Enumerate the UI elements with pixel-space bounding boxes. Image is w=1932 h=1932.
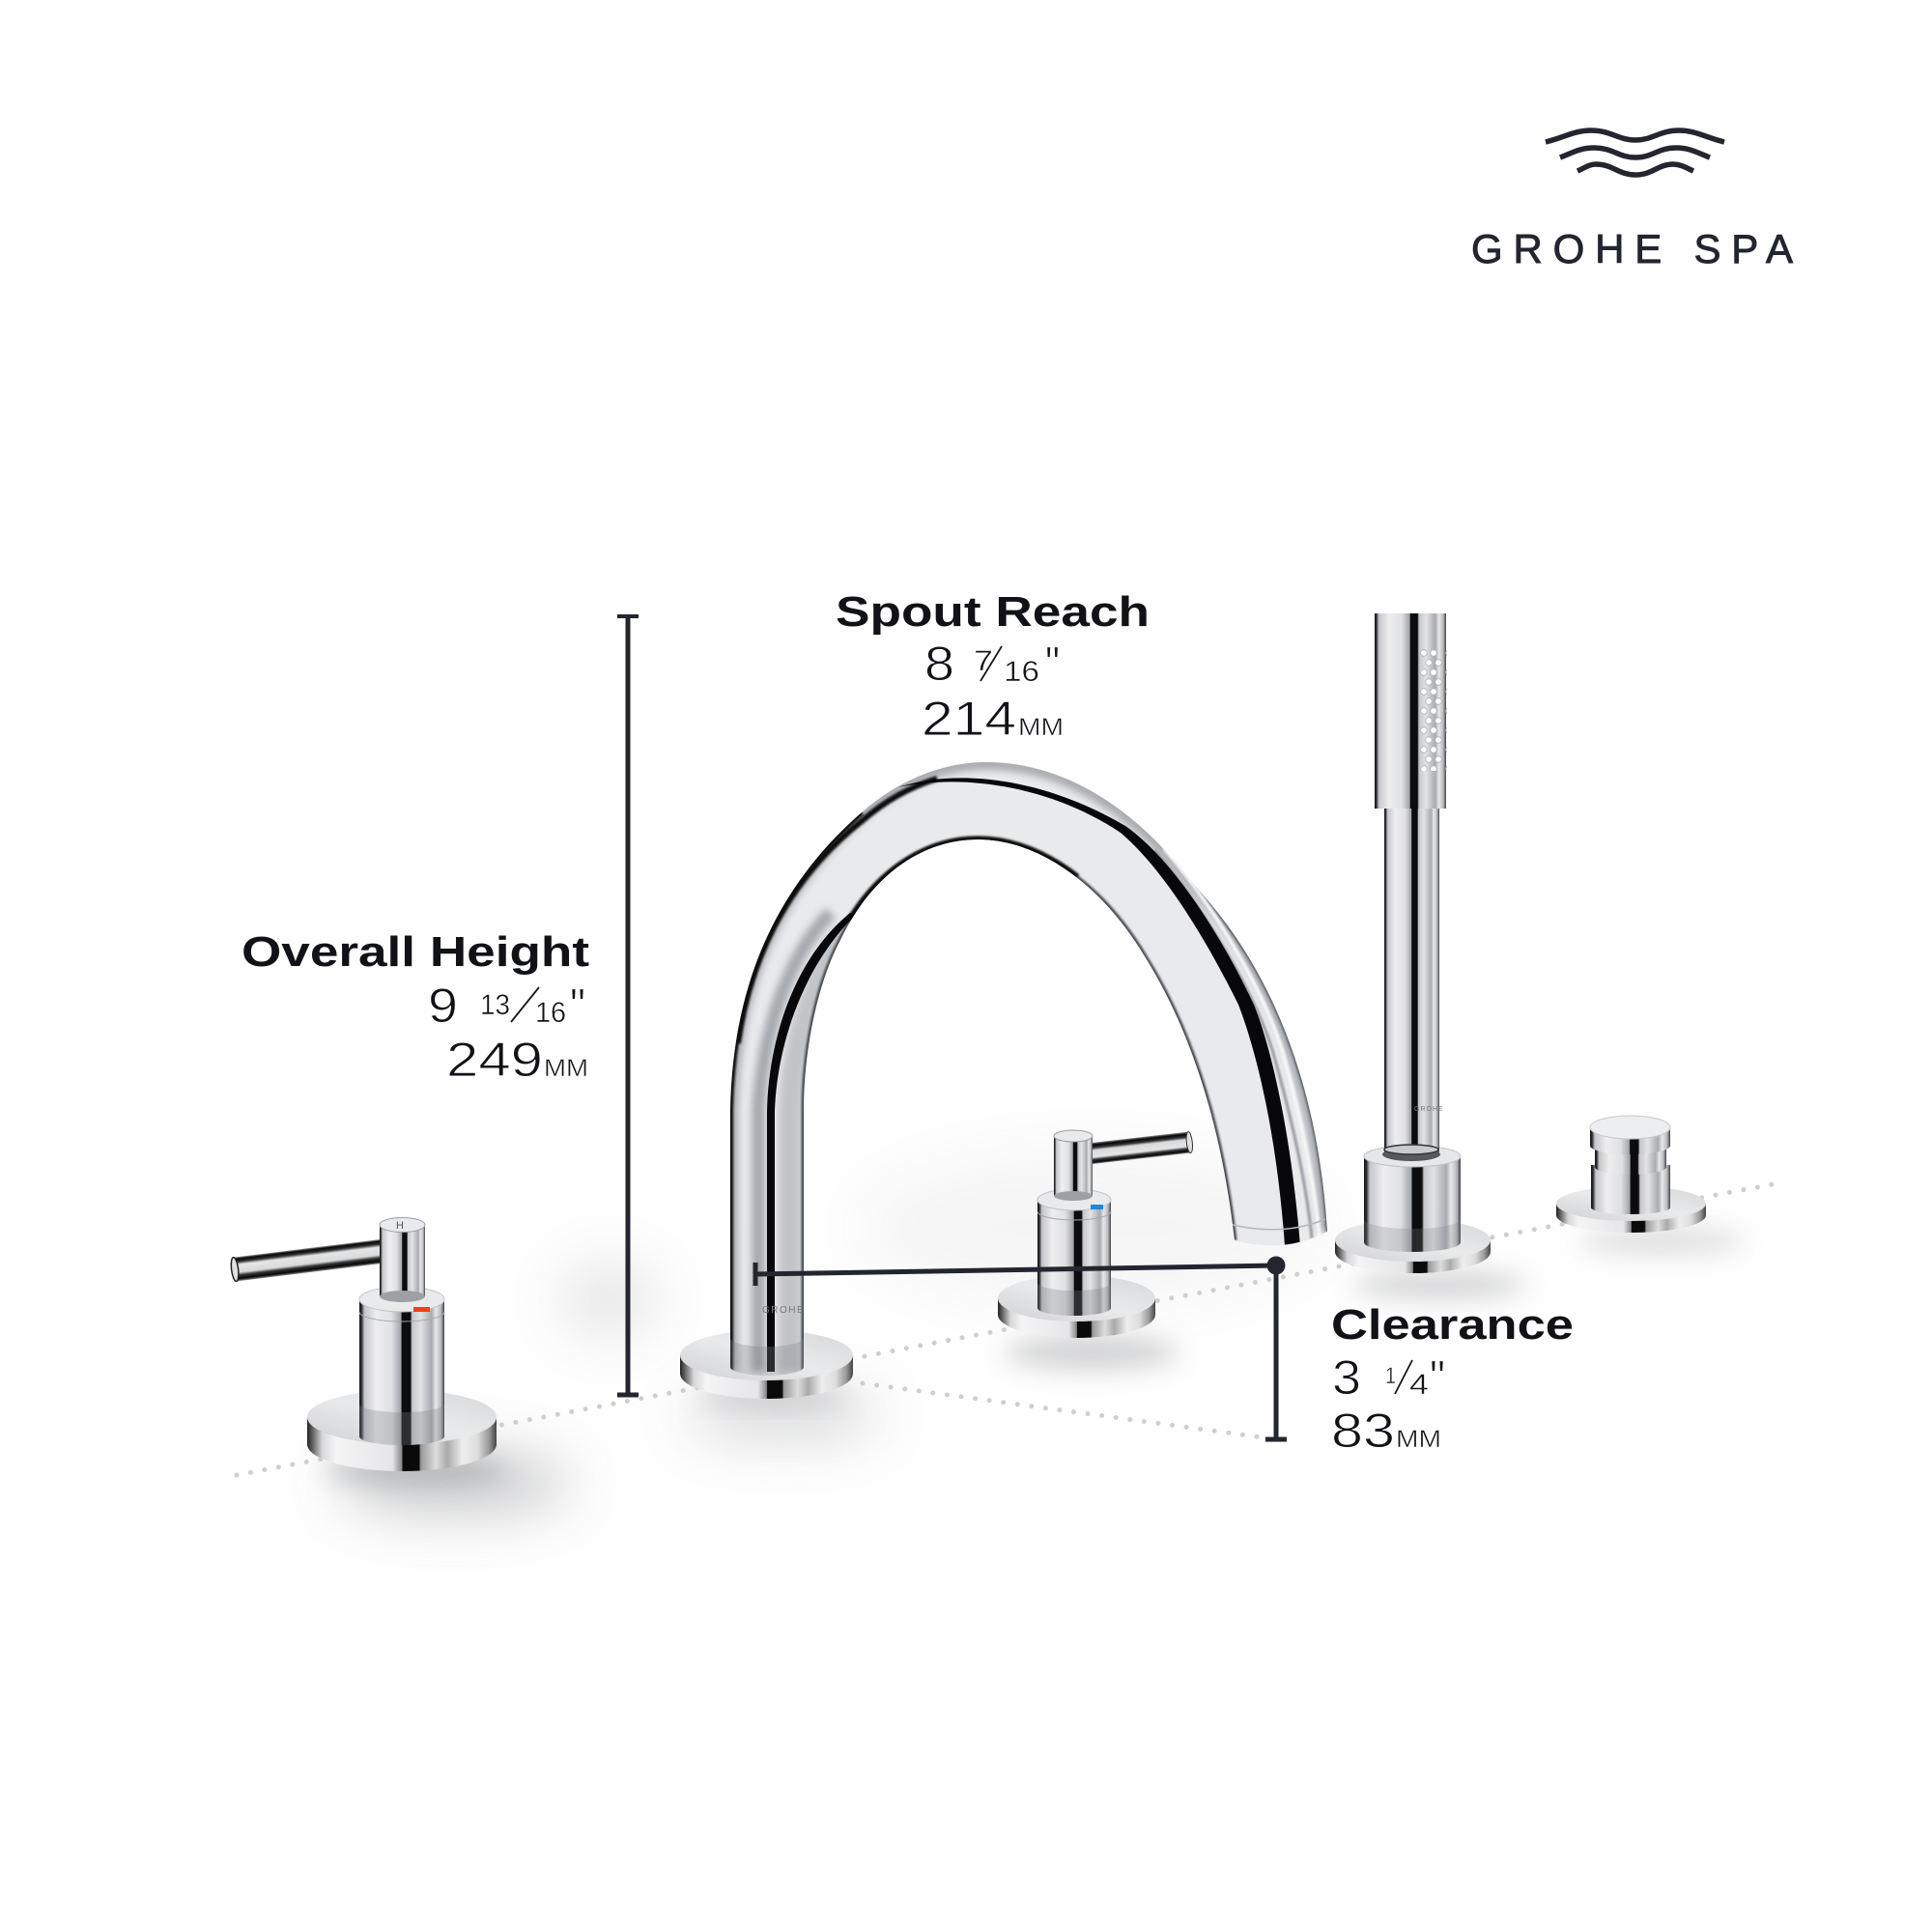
faucet: cold handle bbox=[998, 1130, 1194, 1338]
value: spout reach millimetres bbox=[922, 692, 1064, 746]
foot reflection bbox=[730, 1338, 804, 1376]
black streak right bbox=[898, 778, 1300, 1246]
faucet: spout bbox=[680, 744, 1343, 1399]
logo wordmark: GROHE SPA bbox=[1471, 226, 1799, 271]
value: clearance millimetres: MM bbox=[1396, 1426, 1441, 1453]
value: overall height inches bbox=[428, 979, 585, 1033]
faucet: hot handle bbox=[230, 1217, 497, 1471]
hand shower holder bbox=[1364, 1146, 1461, 1252]
faucet: hand shower bbox=[1335, 613, 1491, 1273]
label: clearance bbox=[1331, 1301, 1574, 1458]
hot handle lever bbox=[230, 1238, 389, 1282]
floor shadows bbox=[324, 1150, 1744, 1516]
value: clearance inches: 1 bbox=[1385, 1363, 1396, 1389]
hot handle upper stem bbox=[380, 1217, 425, 1302]
heading: clearance: Clearance bbox=[1331, 1301, 1574, 1349]
logo: Grohe Spa bbox=[1471, 130, 1799, 271]
dimension: overall height bar bbox=[617, 616, 639, 1395]
nozzle line bbox=[1233, 1219, 1325, 1230]
dotted floor lines bbox=[237, 1184, 1773, 1475]
value: overall height inches: " bbox=[570, 979, 585, 1033]
faucet: diverter knob bbox=[1556, 1116, 1706, 1233]
reflection beyond streak bbox=[1154, 850, 1312, 1238]
heading: overall height: Overall Height bbox=[242, 928, 589, 976]
value: overall height inches: 9 bbox=[428, 979, 458, 1033]
label: spout reach bbox=[836, 588, 1150, 746]
value: spout reach inches: 16 bbox=[1004, 656, 1039, 688]
hot handle base disc bbox=[307, 1390, 497, 1471]
value: clearance millimetres: 83 bbox=[1331, 1404, 1395, 1458]
value: overall height millimetres bbox=[446, 1033, 588, 1087]
cold handle body bbox=[1037, 1189, 1111, 1316]
spout arch bbox=[715, 744, 1343, 1391]
value: spout reach millimetres: MM bbox=[1018, 714, 1064, 741]
cold handle upper stem bbox=[1054, 1130, 1093, 1201]
black streak left bbox=[767, 913, 858, 1372]
diverter top cap bbox=[1590, 1116, 1670, 1154]
value: spout reach inches: 8 bbox=[924, 637, 954, 691]
inner lit band bbox=[790, 932, 848, 1372]
cold handle lever bbox=[1083, 1131, 1194, 1165]
hand shower wand bbox=[1382, 809, 1444, 1161]
label: overall height bbox=[242, 928, 589, 1087]
spout base disc bbox=[680, 1330, 853, 1399]
value: spout reach inches: " bbox=[1045, 637, 1060, 691]
icon: three waves bbox=[1546, 130, 1724, 175]
diverter collar bbox=[1595, 1148, 1666, 1175]
value: clearance inches: 4 bbox=[1409, 1369, 1429, 1401]
value: spout reach millimetres: 214 bbox=[922, 692, 1016, 746]
value: spout reach inches: 7 bbox=[974, 645, 993, 677]
value: overall height millimetres: 249 bbox=[446, 1033, 543, 1087]
hot handle upper stem: H bbox=[396, 1220, 404, 1232]
hot handle body bbox=[359, 1287, 444, 1445]
diverter base disc bbox=[1556, 1186, 1706, 1233]
hot indicator bbox=[413, 1307, 430, 1312]
diverter lower cylinder bbox=[1591, 1165, 1670, 1214]
cold indicator bbox=[1091, 1205, 1103, 1209]
value: clearance inches bbox=[1332, 1350, 1445, 1405]
value: spout reach inches bbox=[924, 637, 1060, 691]
engraved mark: GROHE SPA bbox=[762, 1305, 832, 1316]
value: overall height inches: 13 bbox=[480, 989, 510, 1021]
value: clearance inches: " bbox=[1430, 1350, 1445, 1405]
heading: spout reach: Spout Reach bbox=[836, 588, 1150, 636]
hand shower head bbox=[1375, 613, 1447, 809]
dimension: spout reach and clearance bars bbox=[755, 1256, 1287, 1439]
value: clearance millimetres bbox=[1331, 1404, 1441, 1458]
hand shower wand: GROHE bbox=[1414, 1106, 1444, 1113]
hand shower base disc bbox=[1335, 1219, 1491, 1273]
cold handle base disc bbox=[998, 1275, 1155, 1338]
value: clearance inches: 3 bbox=[1332, 1350, 1361, 1405]
value: overall height millimetres: MM bbox=[544, 1055, 588, 1082]
value: overall height inches: 16 bbox=[535, 997, 566, 1029]
